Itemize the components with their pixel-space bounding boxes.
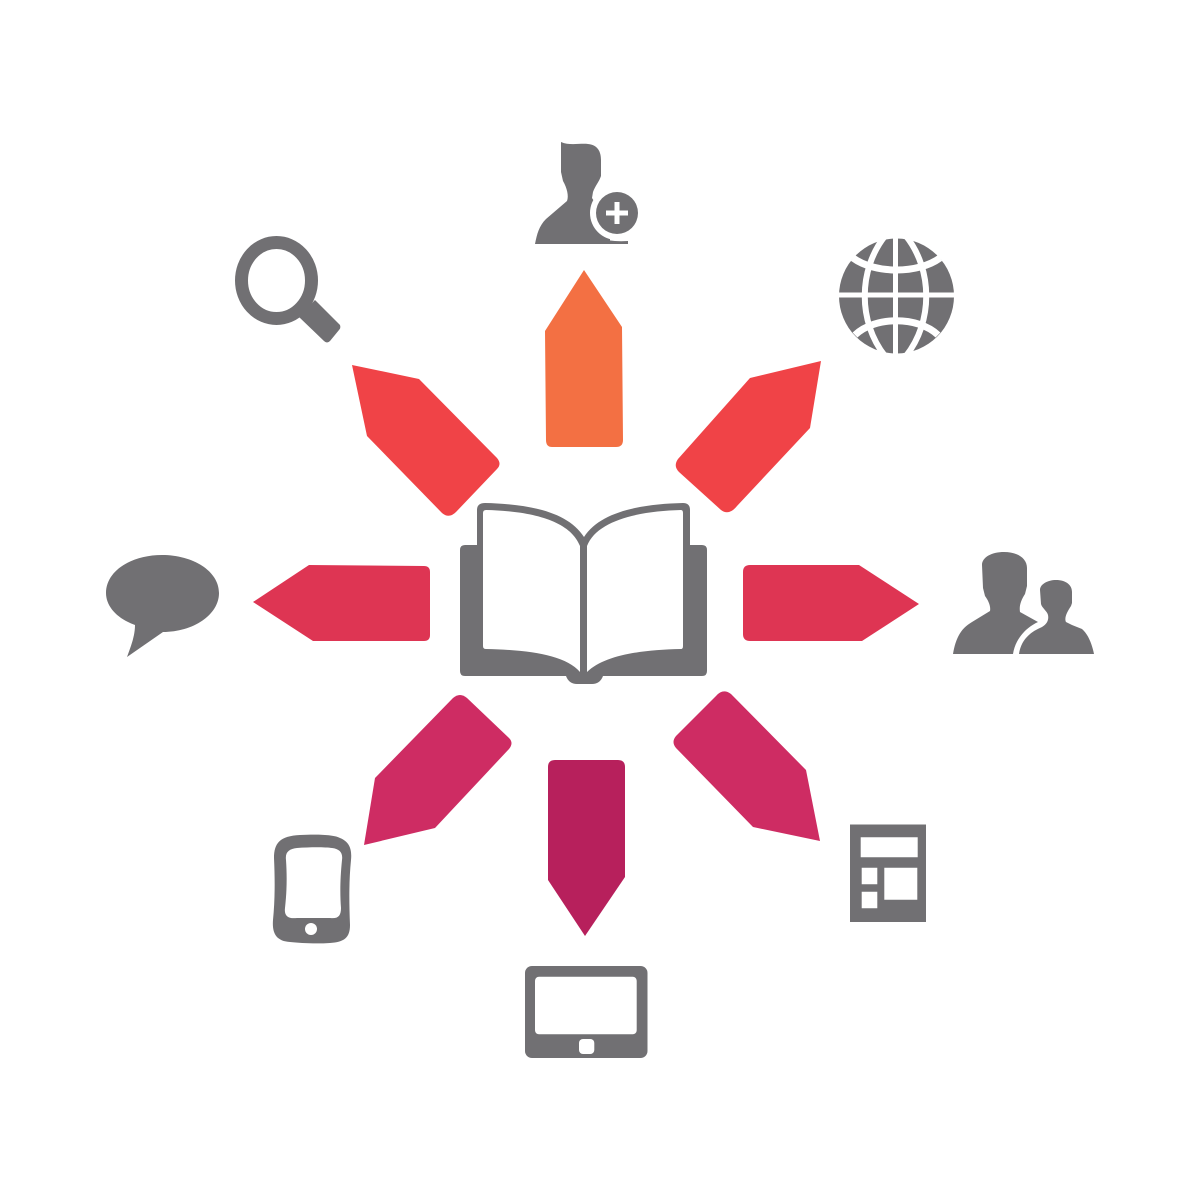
arrow: left (253, 565, 430, 641)
arrow: lower right (674, 691, 820, 841)
icon: tablet portrait (273, 835, 351, 943)
icon: tablet landscape (525, 966, 648, 1058)
arrow: top orange (545, 270, 623, 447)
arrow: upper right (676, 361, 821, 512)
arrow: upper left (352, 365, 500, 516)
icon: speech bubble (106, 555, 219, 657)
arrow: right (743, 565, 919, 641)
icon: magnifying glass (242, 242, 340, 342)
icon: page layout (850, 824, 926, 922)
icon: add user (535, 142, 644, 244)
icon: two users (953, 552, 1094, 654)
arrow: bottom (548, 760, 625, 936)
icon: open book (460, 503, 707, 684)
icon: globe (835, 234, 958, 358)
arrow: lower left (364, 695, 512, 845)
